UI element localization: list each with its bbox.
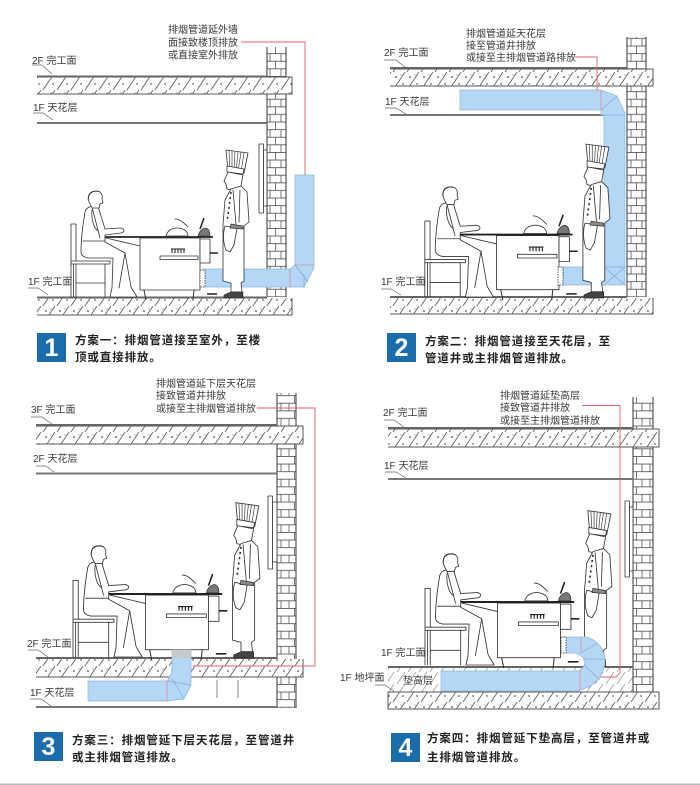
number badge 3 [34, 732, 63, 761]
number badge 2: 2 [395, 334, 408, 362]
level label raised layer: 垫高层 [403, 674, 433, 687]
level label 1F floor [28, 275, 72, 295]
brick wall [633, 397, 653, 692]
caption 1: 顶或直接排放。 [75, 350, 162, 364]
level label 1F ceiling: 1F 天花层 [30, 686, 74, 699]
level label 1F floor: 1F 完工面 [381, 275, 425, 288]
wall-mounted panel [259, 144, 267, 213]
exhaust duct [203, 175, 314, 287]
diner, teppanyaki counter and chef [425, 511, 612, 668]
joists [217, 680, 238, 698]
floor slab [390, 297, 653, 314]
level label 2F: 2F 完工面 [384, 46, 428, 59]
red leader line [582, 406, 620, 677]
caption 4: 方案四：排烟管延下垫高层，至管道井或 [427, 733, 650, 745]
callout text: 或接至主排烟管道排放 [156, 402, 256, 415]
3F slab [36, 425, 303, 444]
panel: scheme 2 [381, 27, 653, 365]
2F slab [388, 428, 659, 447]
raised floor layer [388, 667, 633, 692]
level label 1F ceiling: 1F 天花层 [384, 459, 428, 472]
base slab [388, 692, 659, 709]
callout text: 或接至主排烟管道路排放 [466, 51, 576, 64]
level label 2F ceiling: 2F 天花层 [33, 452, 77, 465]
diner, teppanyaki counter and chef [71, 150, 249, 300]
panel: scheme 4 [340, 389, 659, 764]
callout text: 或接至主排烟管道排放 [500, 414, 600, 427]
callout text: 接致管道井排放 [156, 389, 226, 402]
1F ceiling line [388, 478, 633, 480]
bottom rule [0, 784, 700, 785]
level label 1F ceiling [385, 95, 429, 114]
1F ceiling line [390, 114, 604, 116]
callout text: 接至管道井排放 [466, 39, 536, 52]
wall-mounted panel [268, 496, 277, 569]
caption 1: 方案一：排烟管道接至室外，至楼 [75, 335, 261, 347]
callout text: 排烟管道延外墙 [168, 25, 238, 36]
level label 1F floor [381, 275, 425, 295]
2F floor slab [36, 658, 303, 677]
coil under counter [558, 267, 563, 285]
2F slab [390, 68, 653, 86]
level label 1F ceiling: 1F 天花层 [33, 101, 77, 114]
level label 2F ceiling [33, 452, 77, 472]
wall-mounted panel [625, 501, 633, 577]
2F ceiling line [36, 472, 277, 474]
level label 1F floor: 1F 完工面 [28, 275, 72, 288]
1F ceiling line [37, 122, 267, 124]
panel: scheme 1 [28, 23, 314, 364]
level label ground [340, 671, 395, 692]
level label 2F [383, 406, 427, 427]
callout text: 接致管道井排放 [500, 401, 570, 414]
exhaust duct [441, 637, 605, 691]
red leader line [575, 57, 597, 90]
number badge 4 [391, 733, 420, 762]
exhaust duct [460, 90, 625, 285]
1F ceiling line [36, 706, 277, 708]
caption 2: 方案二：排烟管道接至天花层，至 [425, 336, 611, 348]
level label 1F ceiling: 1F 天花层 [385, 95, 429, 108]
number badge 1: 1 [45, 334, 59, 362]
coil under counter [200, 270, 205, 287]
level label 3F [31, 403, 75, 424]
level label 2F: 2F 完工面 [32, 54, 76, 67]
level label ground: 1F 地坪面 [340, 671, 384, 684]
level label 1F floor: 1F 完工面 [381, 646, 425, 659]
caption 3: 或主排烟管道排放。 [72, 750, 184, 764]
coil under counter [561, 637, 566, 653]
number badge 4: 4 [399, 734, 413, 762]
brick wall [277, 393, 296, 708]
level label 3F: 3F 完工面 [31, 403, 75, 416]
floor slab [37, 298, 292, 315]
level label 1F ceiling [33, 101, 77, 120]
level label 2F [32, 54, 76, 74]
number badge 1 [37, 333, 66, 362]
callout text: 排烟管道延下层天花层 [156, 379, 256, 390]
caption 4: 主排烟管道排放。 [427, 750, 526, 764]
level label 2F [384, 46, 428, 67]
brick wall [627, 37, 646, 297]
caption 3: 方案三：排烟管延下层天花层，至管道井 [72, 735, 295, 747]
2F slab [37, 76, 292, 94]
red leader line [193, 408, 315, 666]
level label 2F: 2F 完工面 [383, 406, 427, 419]
level label 1F ceiling [30, 686, 74, 706]
number badge 3: 3 [42, 733, 55, 761]
callout text: 面接致楼顶排放 [168, 36, 238, 49]
caption 2: 管道井或主排烟管道排放。 [425, 351, 574, 365]
level label 1F ceiling [384, 459, 428, 478]
level label 2F floor [27, 637, 71, 657]
level label 2F floor: 2F 完工面 [27, 637, 71, 650]
red leader line [241, 42, 305, 175]
diner, teppanyaki counter and chef [425, 144, 610, 300]
brick wall [267, 47, 286, 297]
panel: scheme 3 [27, 377, 315, 764]
callout text: 排烟管道延天花层 [466, 29, 546, 40]
diner, teppanyaki counter and chef [73, 503, 260, 660]
exhaust duct [88, 650, 191, 701]
callout text: 或直接室外排放 [168, 48, 238, 62]
callout text: 排烟管道延垫高层 [500, 391, 580, 402]
number badge 2 [387, 333, 416, 362]
